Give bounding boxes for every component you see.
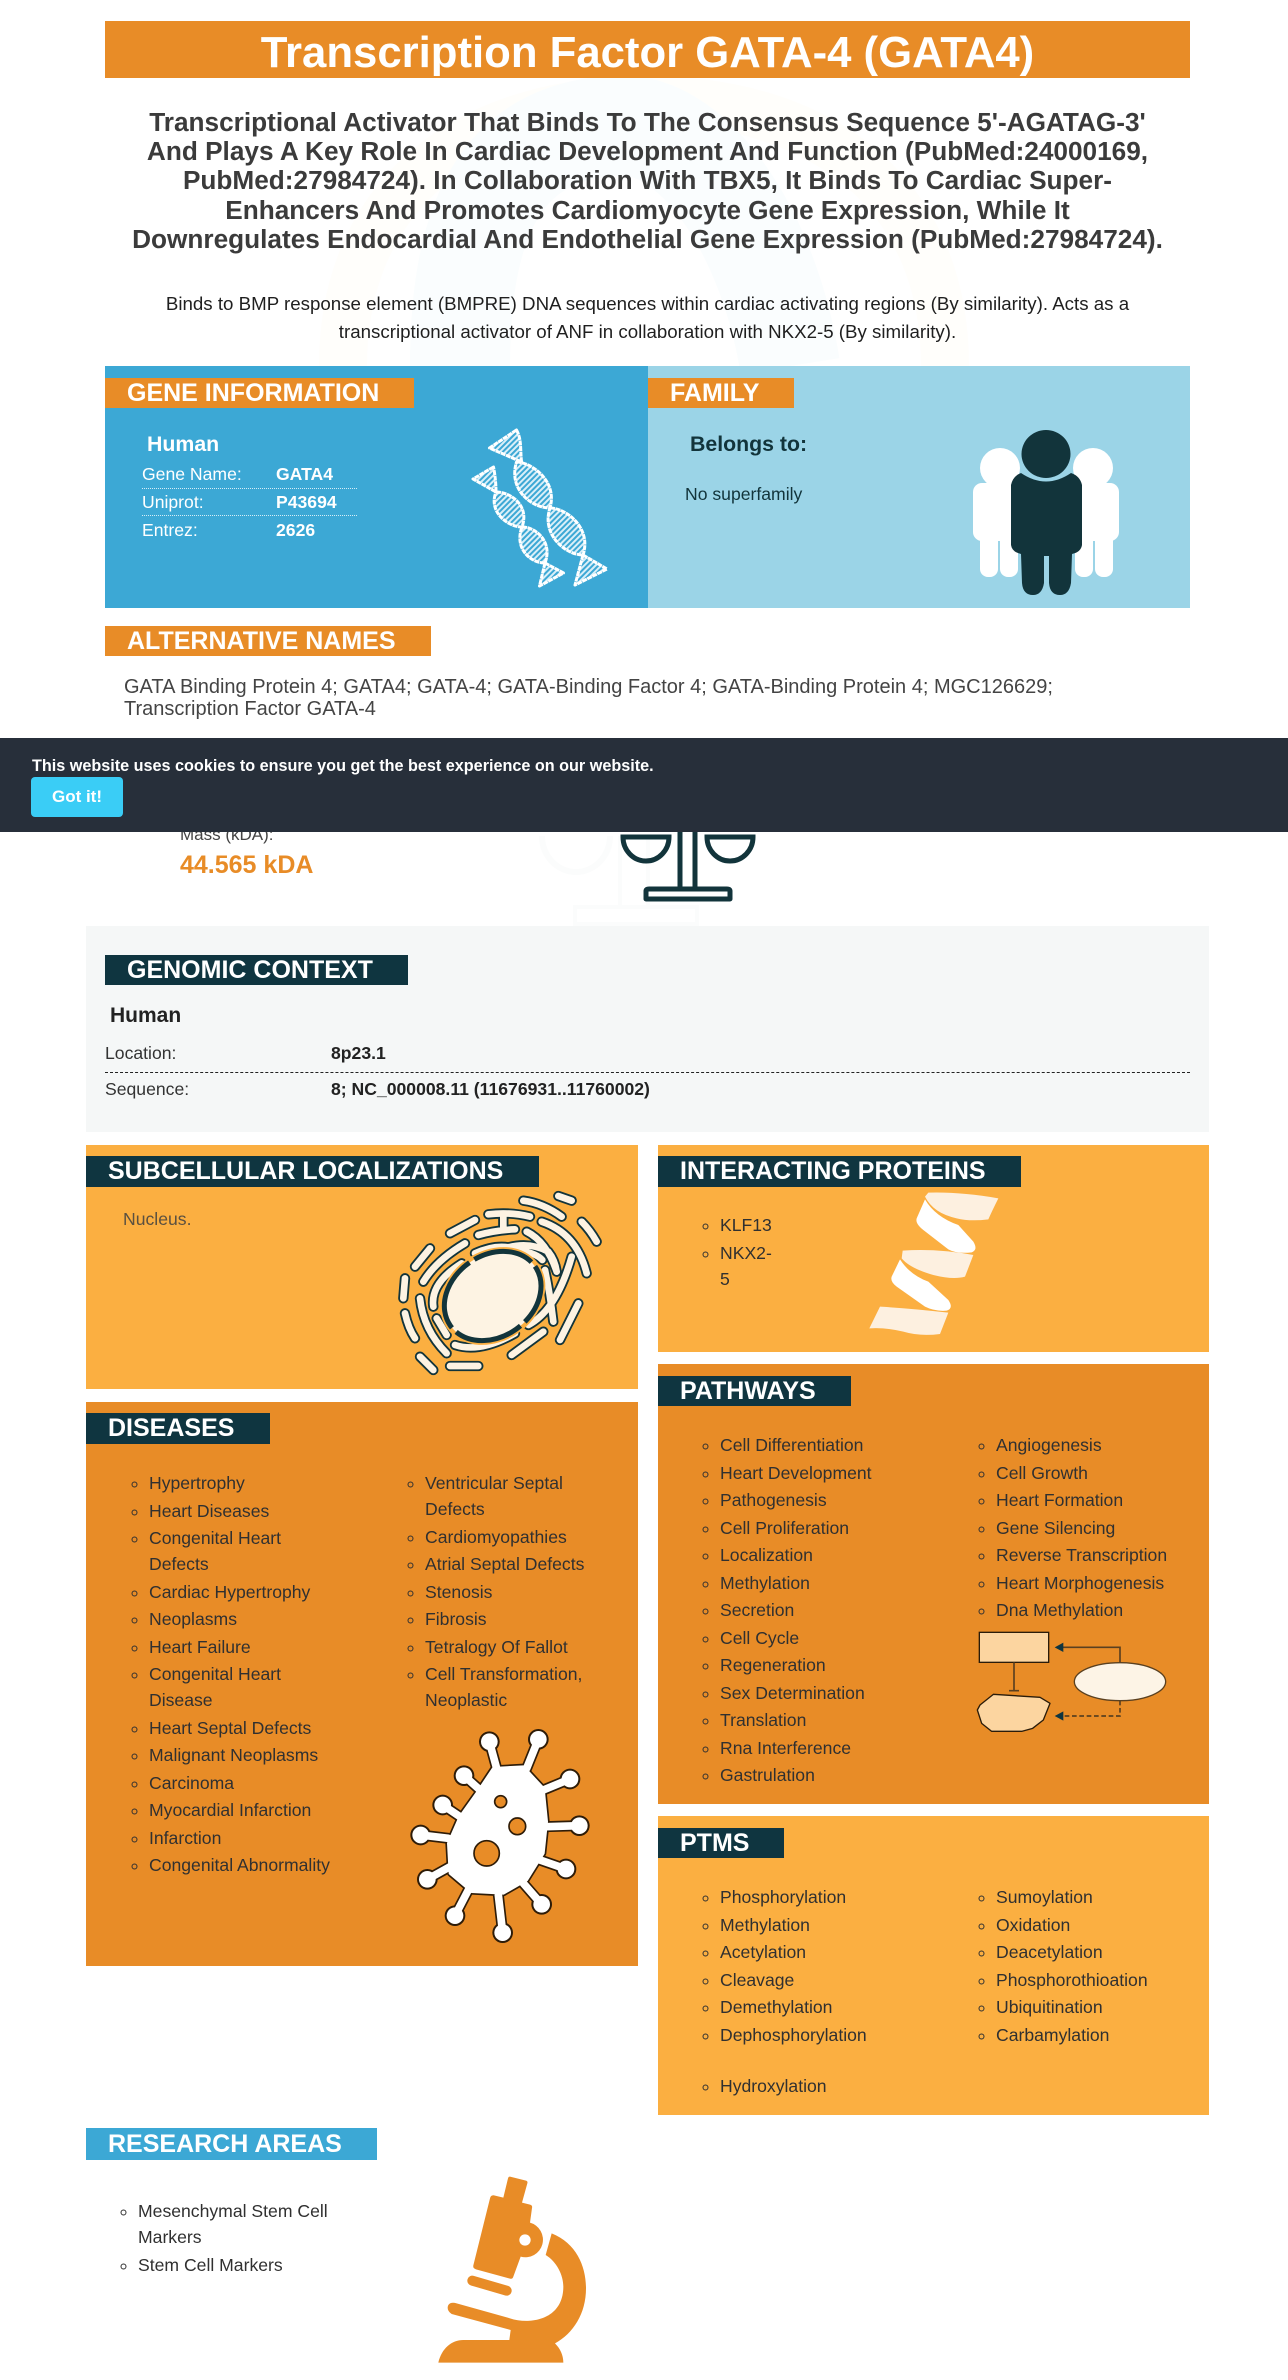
list: diseases column two: Neoplastic xyxy=(425,1690,507,1710)
list: diseases column one: Defects xyxy=(149,1554,209,1574)
row: gene name: GATA4 xyxy=(276,464,333,484)
heading: diseases: DISEASES xyxy=(108,1414,234,1442)
description paragraph: Binds to BMP response element (BMPRE) DNA sequences within cardiac activating regions (By similarity). Acts as a xyxy=(166,293,1129,314)
list: PTMs column one: Cleavage xyxy=(720,1970,794,1990)
panel: gene information xyxy=(105,366,648,608)
row: entrez xyxy=(142,520,315,540)
heading: family xyxy=(648,378,794,408)
list: PTMs column two: Deacetylation xyxy=(996,1942,1103,1962)
panel: subcellular localizations xyxy=(86,1145,638,1389)
row: sequence: 8; NC_000008.11 (11676931..11760002) xyxy=(331,1079,650,1099)
row: uniprot: Uniprot: xyxy=(142,492,204,512)
gene details table xyxy=(142,464,357,540)
mass label: Mass (kDA): xyxy=(180,825,274,844)
list: pathways column one: Heart Development xyxy=(720,1462,872,1482)
species label: Human xyxy=(110,1004,181,1027)
heading: diseases xyxy=(86,1413,270,1444)
section: research areas xyxy=(86,2128,586,2363)
list: diseases column two: Defects xyxy=(425,1499,485,1519)
icon: group of people xyxy=(973,430,1119,595)
subtitle: function summary: Downregulates Endocardial And Endothelial Gene Expression (PubMed:27984724). xyxy=(132,224,1163,254)
list: pathways column one: Cell Differentiation xyxy=(720,1435,863,1455)
cookie consent banner xyxy=(0,738,1288,832)
list: PTMs column two: Oxidation xyxy=(996,1914,1070,1934)
list: pathways column one: Translation xyxy=(720,1710,806,1730)
list: PTMs column one: Acetylation xyxy=(720,1942,806,1962)
list: pathways column two: Gene Silencing xyxy=(996,1518,1115,1538)
panel: interacting proteins xyxy=(658,1145,1209,1352)
list: research areas: Stem Cell Markers xyxy=(138,2254,283,2274)
list: pathways column two xyxy=(978,1435,1167,1620)
icon: pathway diagram xyxy=(976,1632,1166,1732)
heading: pathways: PATHWAYS xyxy=(680,1377,816,1405)
list: PTMs column one: Dephosphorylation xyxy=(720,2024,867,2044)
row: location xyxy=(105,1039,1190,1073)
heading: alternative names: ALTERNATIVE NAMES xyxy=(127,627,396,655)
list: diseases column one: Carcinoma xyxy=(149,1772,234,1792)
list: pathways column one: Localization xyxy=(720,1545,813,1565)
subtitle: function summary: Transcriptional Activator That Binds To The Consensus Sequence 5'-AGATAG-3' xyxy=(149,107,1146,137)
list: pathways column one: Methylation xyxy=(720,1572,810,1592)
heading: PTMs xyxy=(658,1828,784,1858)
row: uniprot: P43694 xyxy=(276,492,337,512)
row: gene name xyxy=(142,460,357,489)
heading: subcellular localizations: SUBCELLULAR LOCALIZATIONS xyxy=(108,1157,503,1185)
icon: cell nucleus and endoplasmic reticulum xyxy=(398,1190,602,1376)
list: PTMs column two xyxy=(978,1887,1148,2044)
list: pathways column two: Heart Formation xyxy=(996,1490,1123,1510)
row: gene name: Gene Name: xyxy=(142,464,242,484)
species label: Human xyxy=(147,432,219,456)
title banner: Transcription Factor GATA-4 (GATA4) xyxy=(261,28,1034,77)
row: entrez: 2626 xyxy=(276,520,315,540)
list: pathways column one: Rna Interference xyxy=(720,1738,851,1758)
list: interacting proteins: KLF13 xyxy=(720,1215,772,1235)
cookie message: This website uses cookies to ensure you get the best experience on our website. xyxy=(32,757,654,775)
list: interacting proteins xyxy=(702,1215,772,1288)
list: PTMs column one: Phosphorylation xyxy=(720,1887,846,1907)
list: PTMs column one xyxy=(702,1887,867,2096)
subtitle: function summary: And Plays A Key Role In Cardiac Development And Function (PubMed:24000169, xyxy=(147,136,1148,166)
list: diseases column two: Atrial Septal Defects xyxy=(425,1554,584,1574)
icon: DNA double helix xyxy=(471,428,608,588)
list: pathways column one: Pathogenesis xyxy=(720,1490,827,1510)
list: pathways column one: Gastrulation xyxy=(720,1765,815,1785)
list: PTMs column two: Sumoylation xyxy=(996,1887,1093,1907)
panel: family xyxy=(648,366,1190,608)
icon: balance scale xyxy=(620,832,756,902)
description paragraph xyxy=(166,293,1130,342)
alternative names text xyxy=(124,676,1053,720)
mass value: 44.565 kDA xyxy=(180,851,313,879)
alternative names text: GATA Binding Protein 4; GATA4; GATA-4; GATA-Binding Factor 4; GATA-Binding Protein 4; MGC126629; xyxy=(124,676,1053,698)
list: diseases column one: Infarction xyxy=(149,1828,221,1848)
list: pathways column two: Reverse Transcription xyxy=(996,1545,1167,1565)
list: diseases column one: Neoplasms xyxy=(149,1609,237,1629)
alternative names text: Transcription Factor GATA-4 xyxy=(124,698,376,720)
icon: virus xyxy=(410,1729,590,1943)
list: diseases column two: Tetralogy Of Fallot xyxy=(425,1636,568,1656)
row: location: 8p23.1 xyxy=(331,1043,386,1063)
list: pathways column one: Sex Determination xyxy=(720,1682,865,1702)
list: diseases column two: Ventricular Septal xyxy=(425,1473,563,1493)
list: research areas: Markers xyxy=(138,2227,202,2247)
localization text: Nucleus. xyxy=(123,1209,191,1229)
list: diseases column one: Hypertrophy xyxy=(149,1473,245,1493)
list: pathways column one xyxy=(702,1435,872,1785)
heading: research areas: RESEARCH AREAS xyxy=(108,2130,342,2158)
subtitle: function summary: PubMed:27984724). In Collaboration With TBX5, It Binds To Cardiac Super- xyxy=(183,165,1112,195)
heading: family: FAMILY xyxy=(670,379,759,407)
list: pathways column two: Angiogenesis xyxy=(996,1435,1102,1455)
list: PTMs column two: Phosphorothioation xyxy=(996,1970,1148,1990)
row: entrez: Entrez: xyxy=(142,520,198,540)
subtitle: function summary xyxy=(132,107,1163,254)
title banner xyxy=(105,21,1190,78)
list: pathways column one: Regeneration xyxy=(720,1655,826,1675)
list: research areas: Mesenchymal Stem Cell xyxy=(138,2201,328,2221)
list: interacting proteins: NKX2- xyxy=(720,1242,772,1262)
section: molecular mass xyxy=(180,825,756,902)
list: diseases column two: Fibrosis xyxy=(425,1609,487,1629)
list: PTMs column two: Ubiquitination xyxy=(996,1997,1103,2017)
icon: protein ribbon helix xyxy=(869,1192,998,1335)
button: got it xyxy=(31,777,123,817)
list: diseases column one: Congenital Heart xyxy=(149,1528,281,1548)
heading: pathways xyxy=(658,1376,851,1406)
heading: interacting proteins: INTERACTING PROTEINS xyxy=(680,1157,986,1185)
row: uniprot xyxy=(142,489,357,516)
panel: genomic context xyxy=(86,926,1209,1132)
list: pathways column two: Heart Morphogenesis xyxy=(996,1572,1164,1592)
subtitle: function summary: Enhancers And Promotes Cardiomyocyte Gene Expression, While It xyxy=(225,195,1070,225)
list: pathways column one: Cell Cycle xyxy=(720,1628,799,1648)
section: alternative names xyxy=(105,626,1053,720)
heading: genomic context: GENOMIC CONTEXT xyxy=(127,956,373,984)
list: diseases column one: Congenital Heart xyxy=(149,1664,281,1684)
list: pathways column one: Secretion xyxy=(720,1600,794,1620)
row: sequence xyxy=(105,1079,650,1099)
list: PTMs column one: Hydroxylation xyxy=(720,2076,827,2096)
list: diseases column one: Malignant Neoplasms xyxy=(149,1745,318,1765)
heading: PTMs: PTMS xyxy=(680,1829,749,1857)
panel: pathways xyxy=(658,1364,1209,1804)
list: diseases column two: Stenosis xyxy=(425,1582,492,1602)
family value: No superfamily xyxy=(685,484,802,504)
list: pathways column two: Dna Methylation xyxy=(996,1600,1123,1620)
panel: diseases xyxy=(86,1402,638,1966)
list: research areas xyxy=(120,2201,328,2274)
list: PTMs column two: Carbamylation xyxy=(996,2024,1109,2044)
list: interacting proteins: 5 xyxy=(720,1268,730,1288)
row: location: Location: xyxy=(105,1043,176,1063)
list: diseases column one: Cardiac Hypertrophy xyxy=(149,1582,310,1602)
list: diseases column two: Cell Transformation, xyxy=(425,1664,582,1684)
icon: microscope xyxy=(438,2176,586,2363)
list: diseases column one xyxy=(132,1473,330,1875)
list: diseases column two xyxy=(408,1473,584,1710)
list: pathways column two: Cell Growth xyxy=(996,1462,1088,1482)
list: diseases column one: Myocardial Infarction xyxy=(149,1800,311,1820)
list: diseases column one: Disease xyxy=(149,1690,213,1710)
list: diseases column one: Congenital Abnormality xyxy=(149,1855,330,1875)
heading: gene information: GENE INFORMATION xyxy=(127,379,379,407)
list: pathways column one: Cell Proliferation xyxy=(720,1518,849,1538)
belongs to label: Belongs to: xyxy=(690,432,807,456)
list: PTMs column one: Methylation xyxy=(720,1914,810,1934)
panel: PTMs xyxy=(658,1816,1209,2115)
list: diseases column one: Heart Failure xyxy=(149,1636,251,1656)
row: sequence: Sequence: xyxy=(105,1079,189,1099)
list: PTMs column one: Demethylation xyxy=(720,1997,832,2017)
description paragraph: transcriptional activator of ANF in collaboration with NKX2-5 (By similarity). xyxy=(339,321,956,342)
list: diseases column one: Heart Septal Defects xyxy=(149,1718,311,1738)
list: diseases column one: Heart Diseases xyxy=(149,1500,269,1520)
list: diseases column two: Cardiomyopathies xyxy=(425,1526,567,1546)
button: got it: Got it! xyxy=(52,787,102,806)
